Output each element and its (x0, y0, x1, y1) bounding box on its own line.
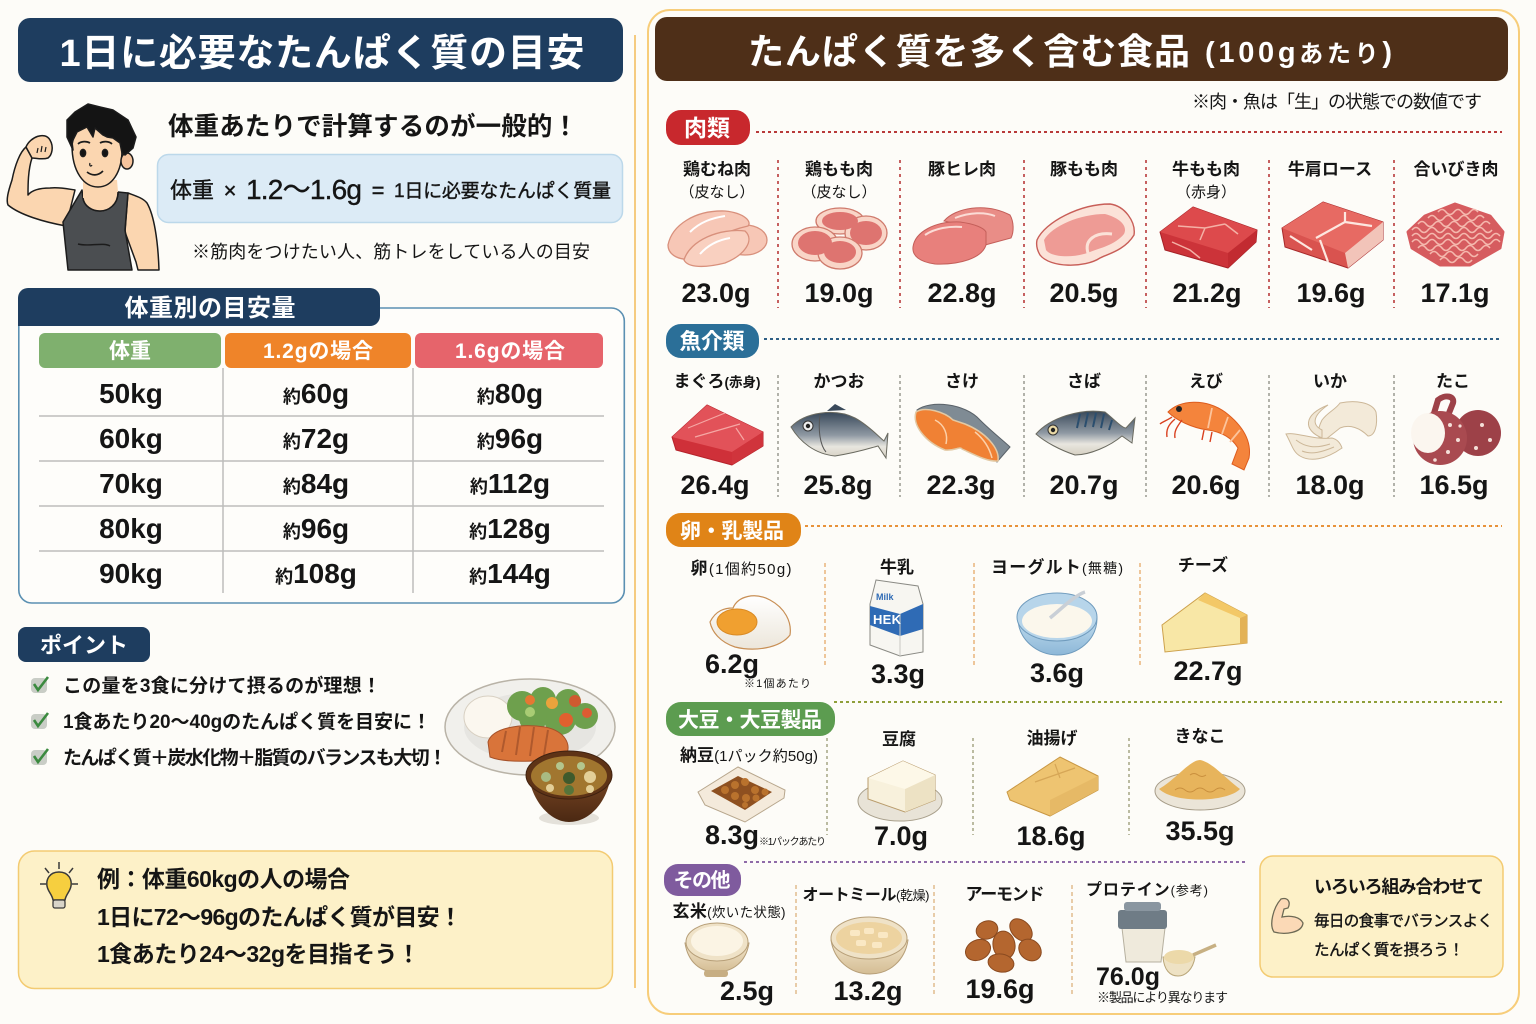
badge: 魚介類 (666, 324, 759, 358)
badge: その他 (664, 864, 741, 896)
food: protein: ※製品により異なります (1097, 990, 1228, 1005)
panel: example callout: 1日に72〜96gのたんぱく質が目安！ (97, 904, 462, 930)
food: bonito (791, 372, 888, 500)
table rows: 約80g (477, 378, 543, 409)
list: points: たんぱく質＋炭水化物＋脂質のバランスも大切！ (63, 747, 447, 769)
food: octopus: たこ (1436, 372, 1470, 391)
note: raw values: ※肉・魚は「生」の状態での数値です (1192, 92, 1482, 112)
panel: formula box: 体重 (170, 178, 214, 203)
food: yogurt: 3.6g (1030, 658, 1084, 688)
food: tofu (858, 730, 942, 851)
table rows: 約72g (283, 423, 349, 454)
column header: 1.6g: 1.6gの場合 (455, 340, 565, 363)
food: fried tofu: 18.6g (1016, 821, 1086, 851)
food: brown rice (672, 901, 786, 1006)
food: chicken thigh (792, 160, 887, 308)
food: egg: 卵(1個約50g) (690, 559, 792, 578)
food: chicken breast: （皮なし） (679, 184, 755, 201)
table rows: 約96g (477, 423, 543, 454)
food: milk: HEK (873, 612, 902, 627)
food: pork fillet: 22.8g (927, 278, 997, 308)
food: protein: プロテイン(参考) (1086, 881, 1208, 899)
panel: formula box: 1日に必要なたんぱく質量 (394, 180, 611, 202)
badge: 肉類 (666, 110, 750, 145)
food: chicken breast: 23.0g (681, 278, 751, 308)
food: almonds: アーモンド (966, 885, 1044, 904)
food: salmon: 22.3g (926, 470, 996, 500)
food: squid: いか (1313, 372, 1347, 391)
column header: 1.2g (225, 333, 411, 368)
food: shrimp: えび (1189, 372, 1223, 391)
food: milk: 3.3g (871, 659, 925, 689)
food: minced meat (1408, 160, 1503, 308)
food: egg (690, 559, 811, 690)
food: cheese (1162, 555, 1247, 686)
food: tuna (672, 372, 763, 500)
illustration: flexing man (7, 104, 159, 270)
food: chicken breast (668, 160, 767, 308)
food: tofu: 豆腐 (882, 730, 916, 749)
food: octopus: 16.5g (1419, 470, 1489, 500)
food: cheese: 22.7g (1173, 656, 1243, 686)
food: mackerel: 20.7g (1049, 470, 1119, 500)
section: others (664, 856, 1503, 1006)
food: pork leg: 豚もも肉 (1050, 160, 1118, 179)
panel: formula box: × (224, 178, 236, 203)
table rows: 90kg (99, 558, 163, 589)
food: almonds: 19.6g (965, 974, 1035, 1004)
table rows: 約144g (469, 558, 551, 589)
food: oatmeal (802, 886, 930, 1006)
badge: 大豆・大豆製品: 大豆・大豆製品 (678, 709, 822, 732)
food: beef shoulder loin: 19.6g (1296, 278, 1366, 308)
food: shrimp (1160, 372, 1250, 500)
food: natto: ※1パックあたり (759, 836, 826, 848)
food: beef round: 牛もも肉 (1172, 160, 1240, 179)
section: soy products (666, 702, 1502, 851)
section: seafood (666, 324, 1502, 500)
food: tuna: まぐろ(赤身) (674, 372, 760, 391)
note: target audience: ※筋肉をつけたい人、筋トレをしている人の目安 (192, 242, 590, 262)
badge: 肉類: 肉類 (684, 115, 730, 141)
section: meat (666, 110, 1503, 308)
food: natto: 8.3g (705, 820, 759, 850)
column header: weight (39, 333, 221, 368)
panel: left title banner (18, 18, 623, 82)
list: points: 1食あたり20〜40gのたんぱく質を目安に！ (63, 711, 431, 733)
food: bonito: かつお (814, 372, 864, 391)
food: chicken thigh: 19.0g (804, 278, 874, 308)
food: milk (870, 558, 925, 689)
food: brown rice: 玄米(炊いた状態) (672, 901, 786, 921)
badge: 卵・乳製品 (666, 513, 801, 547)
food: mackerel: さば (1067, 372, 1101, 391)
panel: combination callout: たんぱく質を摂ろう！ (1314, 941, 1464, 959)
panel: left title banner: 1日に必要なたんぱく質の目安 (60, 33, 584, 75)
panel: formula box (158, 154, 622, 222)
table rows (99, 378, 551, 589)
panel: formula box: = (372, 178, 384, 203)
table rows: 80kg (99, 513, 163, 544)
food: natto: 納豆(1パック約50g) (680, 746, 818, 765)
panel: combination callout: いろいろ組み合わせて (1314, 877, 1484, 897)
food: octopus (1411, 372, 1501, 500)
panel: combination callout (1260, 856, 1503, 977)
food: milk: 牛乳 (880, 558, 914, 577)
food: tofu: 7.0g (874, 821, 928, 851)
food: shrimp: 20.6g (1171, 470, 1241, 500)
table rows: 約128g (469, 513, 551, 544)
illustration: meal plate and miso soup (445, 679, 615, 825)
food: squid (1286, 372, 1377, 500)
icon: check 3 (31, 749, 48, 765)
panel: example callout (18, 851, 612, 988)
food: minced meat: 合いびき肉 (1414, 160, 1498, 179)
food: kinako (1155, 727, 1245, 846)
badge: 魚介類: 魚介類 (680, 329, 744, 354)
table rows: 50kg (99, 378, 163, 409)
badge: 大豆・大豆製品 (666, 702, 835, 736)
food: protein: 76.0g (1096, 963, 1160, 991)
food: pork fillet (913, 160, 1013, 308)
panel: right title banner: (100gあたり) (1205, 37, 1392, 69)
badge: その他: その他 (674, 869, 730, 892)
table rows: 60kg (99, 423, 163, 454)
food: cheese: チーズ (1178, 555, 1228, 575)
food: fried tofu: 油揚げ (1026, 729, 1078, 748)
food: almonds (962, 885, 1046, 1004)
list: points: この量を3食に分けて摂るのが理想！ (63, 674, 381, 697)
food: milk: Milk (876, 592, 894, 602)
table rows: 70kg (99, 468, 163, 499)
food: oatmeal: オートミール(乾燥) (802, 886, 930, 904)
food: yogurt: ヨーグルト(無糖) (991, 557, 1123, 577)
food: salmon: さけ (945, 372, 979, 391)
food: pork fillet: 豚ヒレ肉 (928, 160, 996, 179)
panel: formula box: 1.2〜1.6g (246, 174, 362, 205)
column header: 1.6g (415, 333, 603, 368)
food: egg: ※1個あたり (744, 677, 811, 690)
table rows: 約60g (283, 378, 349, 409)
food: chicken thigh: （皮なし） (801, 184, 877, 201)
food: protein (1086, 881, 1228, 1005)
list: points (31, 674, 447, 769)
panel: right title banner: たんぱく質を多く含む食品 (748, 31, 1190, 72)
badge: 卵・乳製品: 卵・乳製品 (680, 520, 784, 543)
food: beef round: （赤身） (1176, 184, 1236, 201)
food: beef shoulder loin: 牛肩ロース (1288, 160, 1372, 179)
table rows: 約112g (470, 468, 550, 499)
panel: example callout: 例：体重60kgの人の場合 (97, 866, 350, 892)
food: pork leg (1037, 160, 1134, 308)
panel: right foods frame (648, 10, 1519, 1014)
table rows: 約84g (283, 468, 349, 499)
panel: weight table (18, 288, 624, 603)
column header: weight: 体重 (109, 340, 151, 363)
food: chicken breast: 鶏むね肉 (683, 160, 751, 179)
food: brown rice: 2.5g (720, 976, 774, 1006)
food: fried tofu (1007, 729, 1098, 851)
food: egg: 6.2g (705, 649, 759, 679)
badge: point: ポイント (40, 633, 128, 658)
icon: check 1 (31, 677, 48, 693)
food: natto (680, 746, 826, 850)
food: beef round: 21.2g (1172, 278, 1242, 308)
food: tuna: 26.4g (680, 470, 750, 500)
food: beef round (1160, 160, 1257, 308)
section: eggs and dairy (666, 513, 1502, 690)
food: mackerel (1036, 372, 1135, 500)
food: oatmeal: 13.2g (833, 976, 903, 1006)
icon: light bulb (40, 862, 78, 908)
table tab heading: 体重別の目安量 (124, 295, 296, 322)
food: kinako: きなこ (1174, 727, 1226, 746)
food: beef shoulder loin (1282, 160, 1383, 308)
table tab heading (18, 288, 380, 326)
heading: calculation headline: 体重あたりで計算するのが一般的！ (168, 112, 578, 141)
panel: right title banner (655, 17, 1508, 81)
food: salmon (915, 372, 1010, 500)
badge: point (18, 627, 150, 662)
panel: example callout: 1食あたり24〜32gを目指そう！ (97, 941, 420, 967)
food: kinako: 35.5g (1165, 816, 1235, 846)
column header: 1.2g: 1.2gの場合 (263, 340, 373, 363)
food: pork leg: 20.5g (1049, 278, 1119, 308)
icon: muscle arm (1272, 899, 1303, 933)
table rows: 約96g (283, 513, 349, 544)
food: squid: 18.0g (1295, 470, 1365, 500)
icon: check 2 (31, 713, 48, 729)
food: bonito: 25.8g (803, 470, 873, 500)
food: yogurt (991, 557, 1123, 688)
left column divider (634, 35, 636, 988)
table rows: 約108g (275, 558, 357, 589)
panel: combination callout: 毎日の食事でバランスよく (1314, 912, 1493, 930)
food: chicken thigh: 鶏もも肉 (805, 160, 873, 179)
food: minced meat: 17.1g (1420, 278, 1490, 308)
